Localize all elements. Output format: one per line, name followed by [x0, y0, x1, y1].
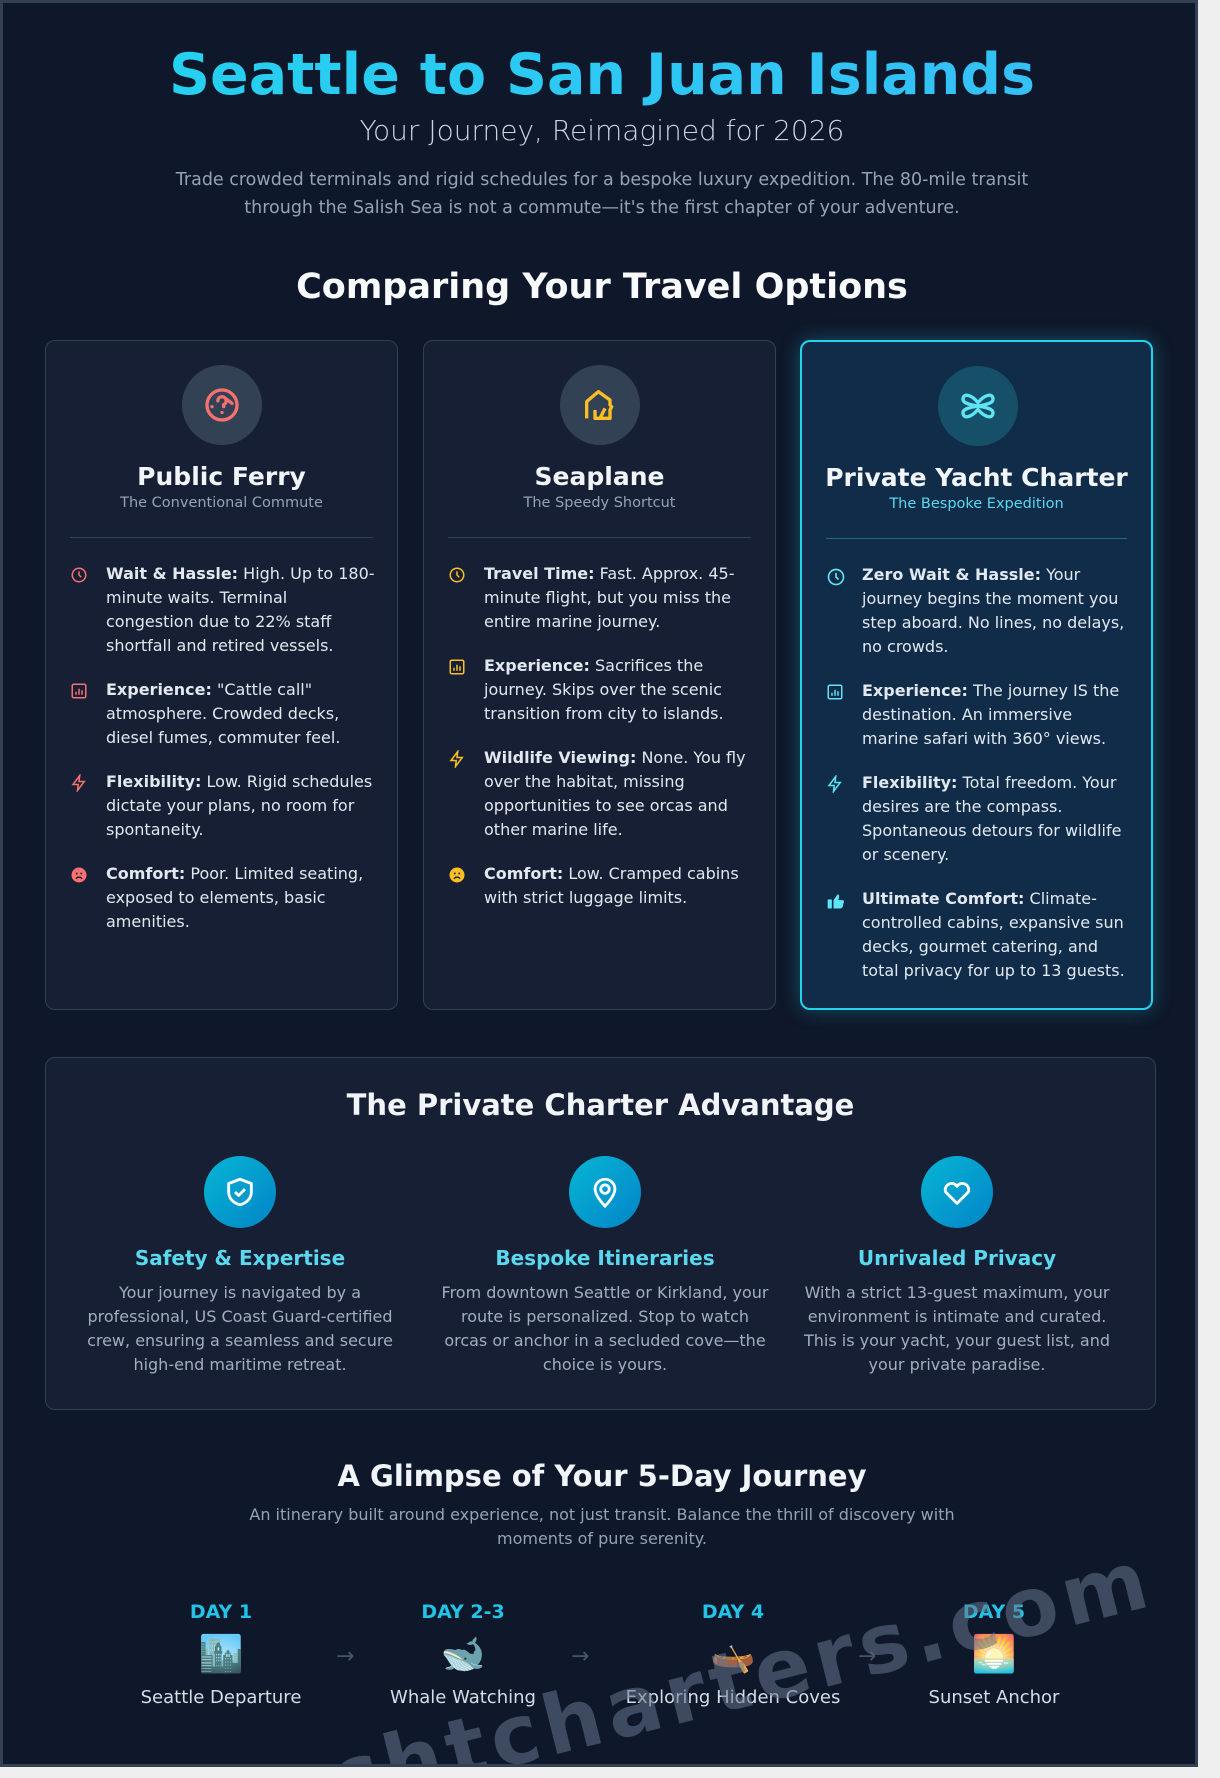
subtitle: Your Journey, Reimagined for 2026	[360, 114, 844, 147]
list: charter features: Ultimate Comfort: Climate-controlled cabins, expansive sun decks, gourmet catering, and total privacy for up to 13 guests.	[862, 889, 1125, 980]
timeline day 1: 🏙️	[199, 1634, 243, 1675]
timeline day 1: Seattle Departure	[141, 1687, 301, 1708]
column: safety	[87, 1156, 393, 1374]
list: charter features: Zero Wait & Hassle: Your journey begins the moment you step aboard. No lines, no delays, no crowds.	[862, 565, 1124, 656]
intro text: Trade crowded terminals and rigid schedules for a bespoke luxury expedition. The 80-mile transit through the Salish Sea is not a commute—it's the first chapter of your adventure.	[176, 170, 1028, 218]
list: ferry features: Experience: "Cattle call" atmosphere. Crowded decks, diesel fumes, commuter feel.	[106, 680, 340, 747]
icon: seaplane	[560, 365, 640, 445]
heading: 5-day journey: A Glimpse of Your 5-Day Journey	[337, 1459, 866, 1493]
heading: advantage: The Private Charter Advantage	[347, 1088, 854, 1122]
timeline day 4: DAY 4	[702, 1601, 764, 1623]
timeline day 2-3: 🐋	[441, 1634, 485, 1675]
panel: private charter advantage	[45, 1057, 1156, 1410]
list: charter features: Flexibility: Total freedom. Your desires are the compass. Spontaneous detours for wildlife or scenery.	[862, 773, 1121, 864]
panel: public ferry	[45, 340, 398, 1010]
timeline day 4: Exploring Hidden Coves	[626, 1687, 840, 1708]
timeline day 2-3	[390, 1601, 536, 1708]
list: ferry features: Comfort: Poor. Limited seating, exposed to elements, basic amenities.	[106, 864, 363, 931]
timeline day 1	[141, 1601, 301, 1708]
panel: private yacht charter: The Bespoke Expedition	[889, 496, 1064, 512]
timeline day 4	[626, 1601, 840, 1708]
card title: Public Ferry	[137, 462, 306, 491]
list: seaplane features: Travel Time: Fast. Approx. 45-minute flight, but you miss the entire marine journey.	[484, 564, 734, 631]
list: seaplane features	[450, 564, 746, 907]
list: seaplane features: Experience: Sacrifices the journey. Skips over the scenic transition from city to islands.	[484, 656, 724, 723]
timeline day 5: Sunset Anchor	[929, 1687, 1059, 1708]
list: charter features	[828, 565, 1125, 980]
list: ferry features	[72, 564, 375, 931]
timeline day 1: DAY 1	[190, 1601, 252, 1623]
list: ferry features: Flexibility: Low. Rigid schedules dictate your plans, no room for spontaneity.	[106, 772, 372, 839]
timeline day 5	[929, 1601, 1060, 1708]
journey intro: An itinerary built around experience, not just transit. Balance the thrill of discovery with moments of pure serenity.	[249, 1505, 955, 1548]
column: privacy: Unrivaled Privacy	[858, 1246, 1056, 1270]
panel: private yacht charter	[800, 340, 1153, 1010]
arrow: →	[571, 1644, 589, 1669]
timeline day 5: 🌅	[972, 1634, 1016, 1675]
panel: public ferry: The Conventional Commute	[120, 495, 323, 511]
list: seaplane features: Wildlife Viewing: None. You fly over the habitat, missing opportunities to see orcas and other marine life.	[484, 748, 746, 839]
card title: Seaplane	[535, 462, 664, 491]
icon: yacht	[938, 366, 1018, 446]
column: safety: Safety & Expertise	[135, 1246, 345, 1270]
list: seaplane features: Comfort: Low. Cramped cabins with strict luggage limits.	[484, 864, 739, 907]
column: privacy	[804, 1156, 1110, 1374]
list: charter features: Experience: The journey IS the destination. An immersive marine safari with 360° views.	[862, 681, 1119, 748]
column: itineraries: Bespoke Itineraries	[495, 1246, 715, 1270]
card title: Private Yacht Charter	[825, 463, 1128, 492]
list: ferry features: Wait & Hassle: High. Up to 180-minute waits. Terminal congestion due to 22% staff shortfall and retired vessels.	[106, 564, 375, 655]
arrow: →	[858, 1644, 876, 1669]
panel: seaplane	[423, 340, 776, 1010]
timeline day 2-3: DAY 2-3	[421, 1601, 505, 1623]
column: safety: Your journey is navigated by a professional, US Coast Guard-certified crew, ensuring a seamless and secure high-end maritime retreat.	[87, 1283, 393, 1374]
timeline day 4: 🛶	[711, 1634, 755, 1675]
icon: ferry	[182, 365, 262, 445]
timeline day 5: DAY 5	[963, 1601, 1025, 1623]
column: itineraries: From downtown Seattle or Kirkland, your route is personalized. Stop to watch orcas or anchor in a secluded cove—the choice is yours.	[442, 1283, 768, 1374]
timeline day 2-3: Whale Watching	[390, 1687, 536, 1708]
heading: comparing: Comparing Your Travel Options	[296, 267, 908, 307]
title: Seattle to San Juan Islands	[169, 42, 1035, 108]
column: itineraries	[442, 1156, 768, 1374]
arrow: →	[336, 1644, 354, 1669]
panel: seaplane: The Speedy Shortcut	[524, 495, 675, 511]
column: privacy: With a strict 13-guest maximum, your environment is intimate and curated. This is your yacht, your guest list, and your private paradise.	[804, 1283, 1110, 1374]
